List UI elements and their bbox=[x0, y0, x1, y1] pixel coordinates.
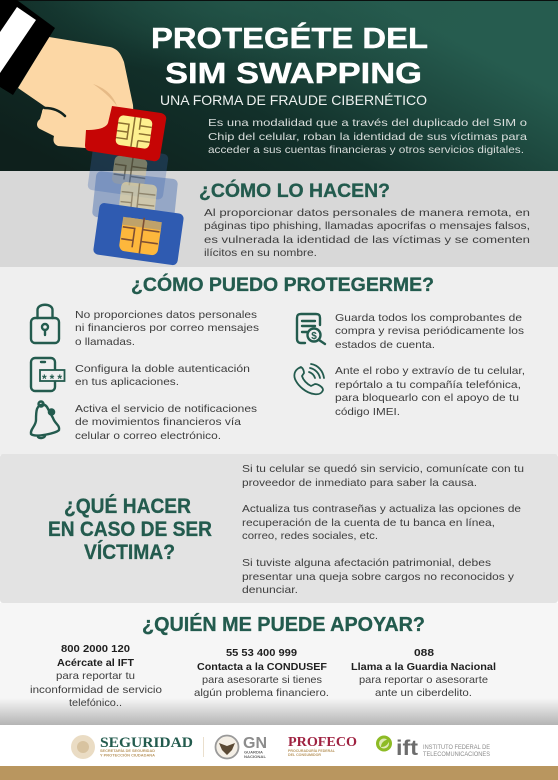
logo: Seguridad bbox=[71, 735, 193, 759]
panel: header bbox=[0, 0, 558, 171]
finger gap bbox=[45, 108, 65, 116]
text: cómo lo hacen: es vulnerada la identidad de las víctimas y se comenten bbox=[204, 234, 530, 246]
heading: cómo lo hacen: ¿CÓMO LO HACEN? bbox=[199, 180, 390, 202]
contact: CONDUSEF: algún problema financiero. bbox=[194, 687, 329, 699]
footer: logos bbox=[0, 725, 558, 766]
icon: phone with password bbox=[31, 358, 64, 391]
contact: IFT: telefónico.. bbox=[69, 697, 122, 709]
logo: Profeco: DEL CONSUMIDOR bbox=[288, 753, 322, 757]
contact: Guardia Nacional: 088 bbox=[414, 647, 434, 659]
logo: Guardia Nacional: GN bbox=[243, 735, 267, 752]
heading: cómo puedo protegerme: ¿CÓMO PUEDO PROTEGERME? bbox=[131, 272, 434, 296]
header description bbox=[208, 117, 527, 156]
tip: comprobantes: compra y revisa periódicamente los bbox=[335, 325, 524, 337]
logo: Seguridad: Y PROTECCIÓN CIUDADANA bbox=[100, 752, 156, 758]
icon: notification bell bbox=[31, 402, 59, 438]
text: queja: Si tuviste alguna afectación patrimonial, debes bbox=[242, 557, 491, 569]
text: sin servicio bbox=[242, 463, 524, 489]
white shirt bbox=[0, 7, 36, 73]
text: cómo lo hacen: páginas tipo phishing, llamadas apocrifas o mensajes falsos, bbox=[204, 220, 530, 232]
contact: Guardia Nacional: Llama a la Guardia Nacional bbox=[351, 661, 496, 673]
contact: Guardia Nacional bbox=[351, 647, 496, 699]
faded card 1 bbox=[87, 144, 169, 200]
contact: CONDUSEF: 55 53 400 999 bbox=[226, 647, 297, 659]
text: cómo lo hacen: Al proporcionar datos personales de manera remota, en bbox=[204, 207, 530, 219]
tip: robo o extravío: para bloquearlo con el apoyo de tu bbox=[335, 392, 519, 404]
blue SIM card bbox=[93, 202, 184, 266]
panel: cómo lo hacen bbox=[0, 171, 558, 267]
contact: IFT: para reportar tu bbox=[56, 670, 135, 682]
heading: qué hacer: EN CASO DE SER bbox=[48, 518, 212, 541]
header description: Chip del celular, roban la identidad de sus víctimas para bbox=[208, 131, 527, 143]
logo: Profeco bbox=[288, 734, 357, 757]
heading: quién me puede apoyar: ¿QUIÉN ME PUEDE APOYAR? bbox=[142, 613, 425, 636]
logo: Profeco: PROFECO bbox=[288, 734, 357, 749]
header description: acceder a sus cuentas financieras y otros servicios digitales. bbox=[208, 144, 524, 156]
tip: datos personales: o llamadas. bbox=[75, 336, 135, 348]
tip: robo o extravío: Ante el robo y extravío de tu celular, bbox=[335, 365, 525, 377]
tip: robo o extravío: código IMEI. bbox=[335, 406, 400, 418]
faded card 2 bbox=[92, 171, 178, 225]
text: contraseñas: recuperación de la cuenta de tu banca en línea, bbox=[242, 517, 495, 529]
logo: Guardia Nacional: GUARDIA bbox=[244, 750, 264, 754]
tip: robo o extravío: repórtalo a tu compañía telefónica, bbox=[335, 379, 521, 391]
logo: Guardia Nacional: NACIONAL bbox=[244, 755, 267, 759]
panel: cómo puedo protegerme bbox=[0, 267, 558, 455]
heading: qué hacer: ¿QUÉ HACER bbox=[64, 495, 191, 518]
tip: doble autenticación bbox=[75, 363, 250, 388]
text: cómo lo hacen: ilícitos en su nombre. bbox=[204, 247, 317, 259]
contact: IFT: 800 2000 120 bbox=[61, 643, 130, 655]
logo: Guardia Nacional bbox=[216, 735, 267, 759]
illustration: hand dropping SIM cards bbox=[0, 0, 184, 266]
footer bar bbox=[0, 766, 558, 780]
text: contraseñas bbox=[242, 503, 521, 542]
hand bbox=[18, 37, 134, 150]
knuckle crease bbox=[93, 84, 117, 106]
icon: padlock bbox=[31, 305, 59, 343]
logo: IFT: ift bbox=[396, 737, 418, 760]
tip: comprobantes bbox=[335, 312, 524, 351]
heading: qué hacer bbox=[48, 495, 212, 564]
text: cómo lo hacen bbox=[204, 207, 530, 259]
logo: Profeco: PROCURADURÍA FEDERAL bbox=[288, 748, 335, 753]
tip: doble autenticación: Configura la doble autenticación bbox=[75, 363, 250, 375]
icon: receipt and magnifier bbox=[297, 314, 325, 344]
contact: CONDUSEF: Contacta a la CONDUSEF bbox=[197, 661, 328, 673]
tip: robo o extravío bbox=[335, 365, 525, 418]
red SIM card bbox=[85, 106, 166, 161]
heading: qué hacer: VÍCTIMA? bbox=[84, 541, 175, 564]
contact: CONDUSEF bbox=[194, 647, 329, 699]
shirt cuff bbox=[0, 0, 55, 95]
panel: quién me puede apoyar bbox=[0, 603, 558, 725]
header description: Es una modalidad que a través del duplicado del SIM o bbox=[208, 117, 527, 129]
contact: CONDUSEF: para asesorarte si tienes bbox=[202, 674, 322, 686]
logo: IFT bbox=[378, 737, 490, 760]
tip: notificaciones: celular o correo electrónico. bbox=[75, 430, 221, 442]
tip: comprobantes: estados de cuenta. bbox=[335, 339, 435, 351]
gold chip bbox=[115, 115, 153, 149]
subtitle: UNA FORMA DE FRAUDE CIBERNÉTICO bbox=[160, 92, 427, 108]
text: sin servicio: proveedor de inmediato para saber la causa. bbox=[242, 477, 477, 489]
panel: qué hacer en caso de ser víctima bbox=[0, 454, 558, 603]
logo: IFT: INSTITUTO FEDERAL DE bbox=[423, 745, 490, 751]
tip: datos personales: ni financieros por correo mensajes bbox=[75, 322, 259, 334]
logo: Seguridad: SEGURIDAD bbox=[100, 735, 193, 751]
title: SIM SWAPPING bbox=[165, 58, 422, 90]
tip: notificaciones: de movimientos financieros vía bbox=[75, 416, 241, 428]
contact: Guardia Nacional: para reportar o asesorarte bbox=[359, 674, 488, 686]
text: queja: presentar una queja sobre cargos no reconocidos y bbox=[242, 571, 515, 583]
text: contraseñas: correo, redes sociales, etc. bbox=[242, 530, 378, 542]
title bbox=[151, 21, 428, 90]
tip: datos personales: No proporciones datos personales bbox=[75, 309, 257, 321]
contact: IFT: inconformidad de servicio bbox=[30, 684, 162, 696]
text: queja bbox=[242, 557, 515, 596]
text: sin servicio: Si tu celular se quedó sin servicio, comunícate con tu bbox=[242, 463, 524, 475]
text: queja: denunciar. bbox=[242, 584, 298, 596]
contact: Guardia Nacional: ante un ciberdelito. bbox=[375, 687, 472, 699]
icon: telephone handset bbox=[294, 364, 324, 394]
contact: IFT bbox=[30, 643, 162, 709]
title: PROTEGÉTE DEL bbox=[151, 21, 428, 55]
icon: phone with password: *** bbox=[42, 372, 62, 386]
text: contraseñas: Actualiza tus contraseñas y actualiza las opciones de bbox=[242, 503, 521, 515]
tip: datos personales bbox=[75, 309, 259, 348]
logo: Seguridad: SECRETARÍA DE SEGURIDAD bbox=[100, 748, 156, 753]
tip: doble autenticación: en tus aplicaciones. bbox=[75, 376, 179, 388]
tip: comprobantes: Guarda todos los comprobantes de bbox=[335, 312, 522, 324]
icon: receipt and magnifier: $ bbox=[311, 331, 317, 342]
logo: IFT: TELECOMUNICACIONES bbox=[423, 752, 490, 758]
contact: IFT: Acércate al IFT bbox=[57, 657, 135, 669]
tip: notificaciones: Activa el servicio de notificaciones bbox=[75, 403, 257, 415]
tip: notificaciones bbox=[75, 403, 257, 442]
